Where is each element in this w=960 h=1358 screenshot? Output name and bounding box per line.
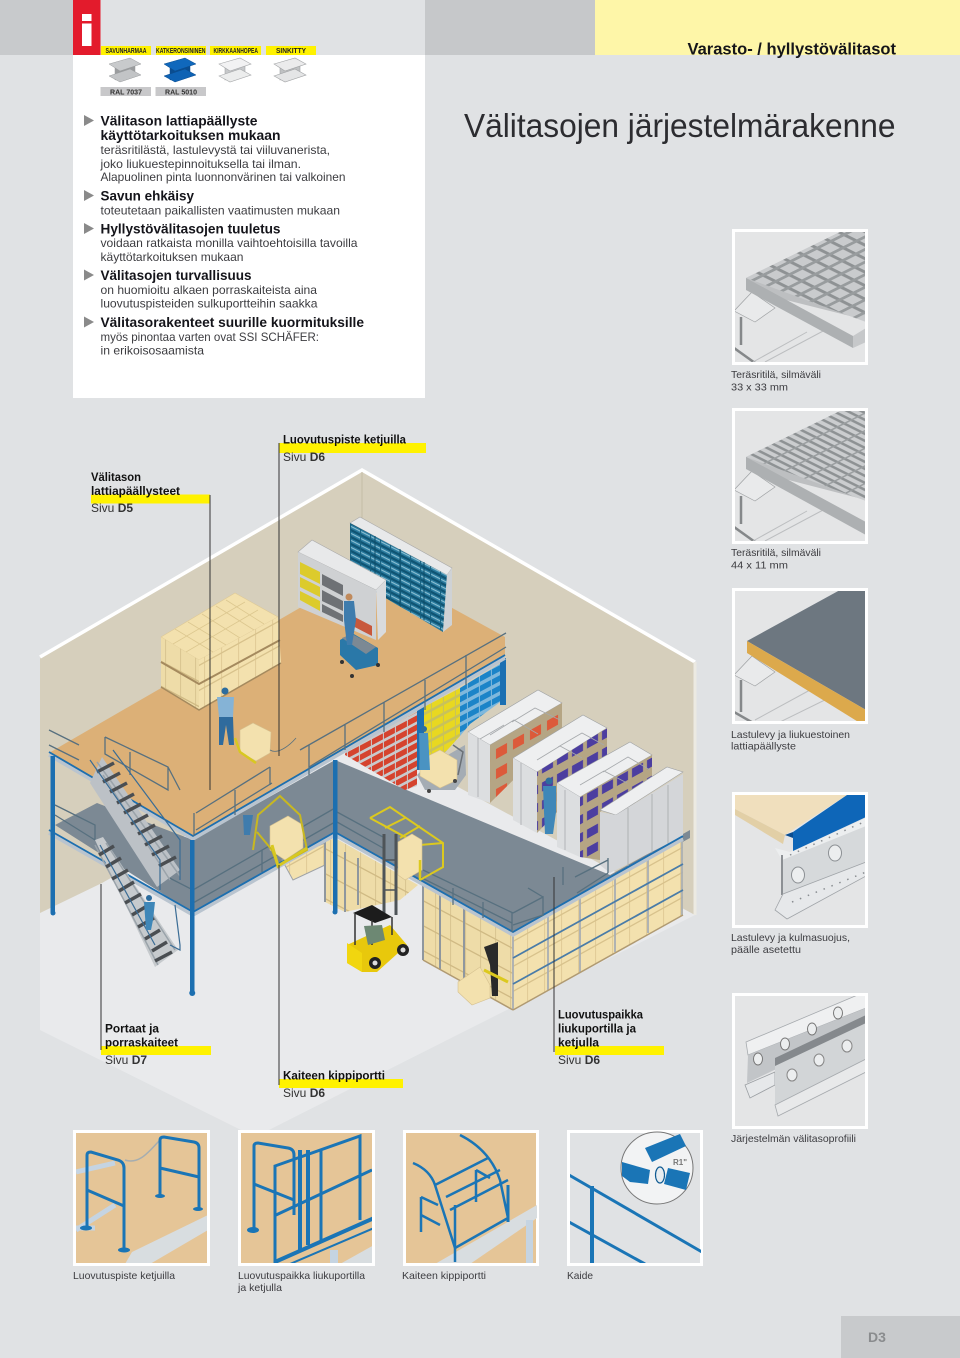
- caption: sliding gate: Luovutuspaikka liukuportilla: [238, 1270, 365, 1282]
- callout: stairs: Sivu D7: [105, 1053, 147, 1067]
- walls: [40, 470, 695, 915]
- upper deck tan floor: [49, 565, 505, 837]
- caption: grating 33 x 33: [731, 369, 821, 394]
- caption: grating 33 x 33: Teräsritilä, silmäväli: [731, 369, 821, 381]
- panel: steel grating 33 x 33: [734, 230, 866, 364]
- icon: railing joint detail: R1": [673, 1158, 687, 1167]
- colour options: KIRKKAANHOPEA: [214, 48, 258, 55]
- worker at shelves: [543, 778, 556, 834]
- caption: system profiles: Järjestelmän välitasoprofiili: [731, 1133, 856, 1145]
- callout: stairs: porraskaiteet: [105, 1036, 178, 1050]
- page number: [841, 1316, 960, 1358]
- panel: chipboard with anti-slip coating: [734, 590, 866, 724]
- caption: sliding gate: [237, 1270, 365, 1294]
- callout: handover point with chains: [279, 432, 426, 756]
- panel: steel grating 44 x 11: [734, 410, 866, 542]
- callout: tilt gate: [279, 865, 403, 1100]
- feature list: joko liukuestepinnoituksella tai ilman.: [99, 157, 301, 171]
- panel: tilt gate: [404, 1132, 538, 1264]
- feature list: [84, 112, 364, 358]
- callout: floor covering: lattiapäällysteet: [91, 484, 180, 498]
- panel: system profiles: [734, 994, 866, 1128]
- feature list: Välitasojen turvallisuus: [100, 267, 252, 283]
- feature list: myös pinontaa varten ovat SSI SCHÄFER:: [100, 330, 319, 344]
- pallet stack on upper deck: [161, 593, 281, 710]
- feature list: teräsritilästä, lastulevystä tai viiluvanerista,: [100, 143, 330, 157]
- rear storage shelves: [298, 517, 452, 640]
- shelving under upper deck: [345, 658, 506, 790]
- caption: chipboard with corner guard: päälle asetettu: [731, 944, 801, 956]
- worker on stairs: [144, 895, 155, 930]
- callout: handover point with chains: Luovutuspiste ketjuilla: [283, 432, 406, 446]
- callout: tilt gate: Kaiteen kippiportti: [283, 1068, 385, 1082]
- panel: chipboard with corner guard: [734, 794, 866, 926]
- callout: sliding gate: Luovutuspaikka: [558, 1008, 643, 1022]
- forklift with pallet: [458, 942, 508, 1005]
- header band: [0, 0, 960, 55]
- feature list: voidaan ratkaista monilla vaihtoehtoisilla tavoilla: [100, 236, 358, 250]
- caption: railing: Kaide: [567, 1270, 593, 1282]
- deck edge beams and railings: [49, 633, 683, 935]
- caption: grating 44 x 11: 44 x 11 mm: [731, 560, 788, 572]
- callout: floor covering: Välitason: [91, 470, 141, 484]
- callout: floor covering: [91, 470, 210, 790]
- caption: grating 44 x 11: [731, 547, 821, 572]
- feature list: Savun ehkäisy: [100, 188, 194, 204]
- colour options: RAL 5010: [165, 88, 197, 96]
- panel: sliding gate with chains: [240, 1132, 374, 1264]
- worker with pallet truck: [217, 688, 271, 763]
- callout: sliding gate: Sivu D6: [558, 1053, 600, 1067]
- caption: chipboard with corner guard: Lastulevy ja kulmasuojus,: [731, 932, 850, 944]
- caption: handover point: Luovutuspiste ketjuilla: [73, 1270, 175, 1282]
- lower mezzanine gray floor: [55, 760, 690, 933]
- yellow tilt gate with load: [243, 796, 307, 866]
- panel: railing: [568, 1132, 702, 1264]
- panel: handover point with chains: [74, 1132, 208, 1264]
- worker and cart at lower deck: [419, 726, 463, 793]
- callout: sliding gate: [554, 877, 664, 1067]
- yellow tilt gate: [370, 807, 443, 880]
- icon: red info tab: [73, 0, 100, 55]
- callout: sliding gate: liukuportilla ja: [558, 1022, 636, 1036]
- colour options: SAVUNHARMAA: [106, 48, 146, 55]
- forklift: [347, 834, 409, 972]
- feature list: on huomioitu alkaen porraskaiteista aina: [100, 283, 317, 297]
- page number: D3: [868, 1329, 886, 1345]
- caption: grating 33 x 33: 33 x 33 mm: [731, 382, 788, 394]
- feature list: Välitason lattiapäällyste: [100, 112, 258, 128]
- caption: sliding gate: ja ketjulla: [237, 1282, 282, 1294]
- callout: handover point with chains: Sivu D6: [283, 450, 325, 464]
- columns: [50, 756, 338, 996]
- callout: stairs: [101, 884, 211, 1067]
- feature list: käyttötarkoituksen mukaan: [100, 127, 280, 143]
- feature list: toteutetaan paikallisten vaatimusten mukaan: [100, 204, 340, 218]
- worker with cart on upper deck: [340, 594, 380, 678]
- feature list: in erikoisosaamista: [100, 344, 204, 358]
- title: Välitasojen järjestelmärakenne: [464, 107, 896, 144]
- callout: stairs: Portaat ja: [105, 1022, 159, 1036]
- caption: chipboard with anti-slip: Lastulevy ja liukuestoinen: [731, 729, 850, 741]
- caption: chipboard with anti-slip: lattiapäällyste: [731, 740, 796, 752]
- feature list: Alapuolinen pinta luonnonvärinen tai valkoinen: [100, 170, 346, 184]
- section label: Varasto- / hyllystövälitasot: [688, 40, 896, 58]
- colour options: KATKERONSININEN: [156, 48, 206, 55]
- colour options: [100, 46, 316, 96]
- caption: chipboard with corner guard: [731, 932, 850, 956]
- stairs: [90, 750, 180, 967]
- main illustration: mezzanine warehouse: [40, 470, 695, 1137]
- rear racks with crates: [468, 690, 683, 873]
- caption: tilt gate: Kaiteen kippiportti: [402, 1270, 486, 1282]
- callout: tilt gate: Sivu D6: [283, 1086, 325, 1100]
- callout: floor covering: Sivu D5: [91, 501, 133, 515]
- feature list: Välitasorakenteet suurille kuormituksille: [100, 314, 364, 330]
- warehouse floor: [40, 735, 695, 1137]
- feature list: käyttötarkoituksen mukaan: [100, 250, 244, 264]
- callout: sliding gate: ketjulla: [558, 1036, 599, 1050]
- panel: features: [73, 46, 425, 398]
- colour options: RAL 7037: [110, 88, 142, 96]
- feature list: luovutuspisteiden sulkuportteihin saakka: [100, 296, 318, 310]
- colour options: SINKITTY: [276, 48, 306, 55]
- caption: grating 44 x 11: Teräsritilä, silmäväli: [731, 547, 821, 559]
- caption: chipboard with anti-slip: [731, 729, 850, 752]
- pallet racks under lower deck: [282, 838, 683, 1010]
- feature list: Hyllystövälitasojen tuuletus: [100, 220, 281, 236]
